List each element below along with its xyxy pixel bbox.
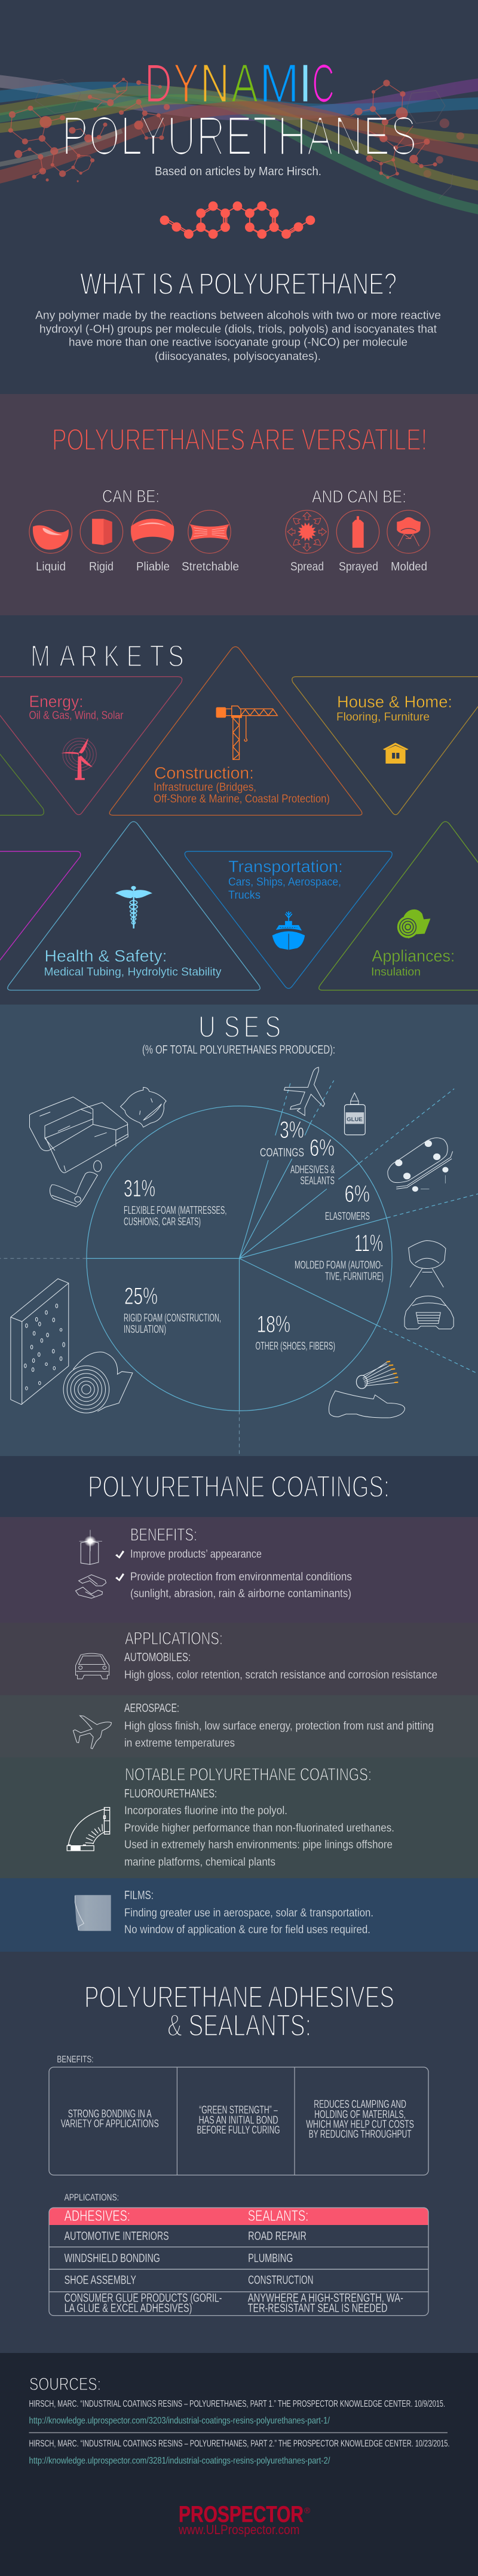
slice label: rigid foam 25 percent: RIGID FOAM (CONSTRUCTION,: [124, 1312, 221, 1324]
slice label: elastomers 6 percent: [325, 1181, 370, 1222]
market: construction: Off-Shore & Marine, Coastal Protection): [154, 793, 330, 805]
market: transportation: [185, 851, 392, 988]
icon: protecting hands: [76, 1575, 106, 1598]
icon: car seat: [50, 1161, 102, 1207]
slice label: adhesives and sealants 6 percent: ADHESIVES &: [290, 1164, 335, 1176]
text: aerospace description: in extreme temperatures: [124, 1737, 235, 1750]
heading: and can be: AND CAN BE:: [312, 487, 406, 507]
slice label: rigid foam 25 percent: INSULATION): [124, 1323, 166, 1335]
icon: pipe elbow: [67, 1808, 110, 1851]
logo: prospector: www.ULProspector.com: [178, 2522, 300, 2537]
icon: insulation roll: [397, 909, 430, 939]
title: DYNAMIC: A: [231, 54, 258, 114]
slice label: coatings 3 percent: COATINGS: [260, 1146, 304, 1159]
table header: [65, 2208, 308, 2224]
slice label: adhesives and sealants 6 percent: SEALANTS: [300, 1174, 335, 1186]
market: appliances: Insulation: [371, 966, 421, 978]
slice label: rigid foam 25 percent: [124, 1283, 221, 1335]
market: appliances: [319, 822, 478, 990]
logo: prospector: [178, 2502, 311, 2537]
table rows: PLUMBING: [248, 2252, 293, 2265]
icon: fibers: [356, 1362, 398, 1388]
icon: shiny box: [79, 1530, 102, 1564]
table: benefits: [49, 2067, 428, 2175]
panel: uses: [0, 1005, 478, 1457]
text block: definition: hydroxyl (-OH) groups per molecule (diols, triols, polyols) and isocyanates that: [39, 322, 437, 335]
title: DYNAMIC: I: [298, 54, 313, 114]
panel: markets: [0, 639, 478, 990]
market: energy: Energy:: [29, 692, 84, 711]
market: house and home: House & Home:: [337, 692, 452, 711]
list item: provide protection: Provide protection from environmental conditions: [130, 1571, 352, 1583]
icon: mattresses: [29, 1097, 128, 1173]
title: DYNAMIC: Y: [173, 54, 199, 114]
market: energy: [0, 677, 182, 814]
icon: molded chair: [409, 1241, 446, 1287]
panel: coatings title: [0, 1456, 478, 1517]
subtitle: Based on articles by Marc Hirsch.: [155, 165, 321, 178]
slice label: elastomers 6 percent: ELASTOMERS: [325, 1210, 370, 1222]
panel: applications automobiles: [0, 1623, 478, 1695]
cell: strong bonding: STRONG BONDING IN A: [68, 2108, 152, 2120]
subheading: fluorourethanes: FLUOROURETHANES:: [124, 1787, 217, 1800]
icon: pillow: [121, 1087, 166, 1127]
table rows: AUTOMOTIVE INTERIORS: [65, 2230, 169, 2243]
slice label: flexible foam 31 percent: [124, 1176, 227, 1228]
slice label: other 18 percent: 18%: [257, 1311, 290, 1338]
text: aerospace description: [124, 1720, 434, 1750]
text: fluorourethanes description: [124, 1805, 394, 1869]
slice label: rigid foam 25 percent: 25%: [124, 1283, 158, 1310]
title: DYNAMIC: D: [145, 54, 172, 114]
text: films description: Finding greater use in aerospace, solar & transportation.: [124, 1907, 373, 1919]
source 1: [29, 2399, 445, 2426]
source 2: [29, 2439, 449, 2466]
shape labels: Stretchable: [182, 560, 239, 573]
market: transportation: Cars, Ships, Aerospace,: [228, 876, 341, 889]
cell: reduces clamping: REDUCES CLAMPING AND: [314, 2098, 406, 2110]
label: benefits: BENEFITS:: [57, 2055, 94, 2065]
slice label: flexible foam 31 percent: 31%: [124, 1176, 155, 1202]
heading: can be: CAN BE:: [102, 487, 160, 506]
market: house and home: Flooring, Furniture: [336, 711, 430, 724]
panel: notable polyurethane coatings: [0, 1757, 478, 1878]
subtitle: percent of total: (% OF TOTAL POLYURETHANES PRODUCED):: [142, 1043, 335, 1057]
table rows: ANYWHERE A HIGH-STRENGTH, WA-: [248, 2292, 403, 2305]
text block: definition: (diisocyanates, polyisocyanates).: [155, 350, 321, 363]
icon: glue bottle: [345, 1093, 365, 1135]
icon: wind turbine: [61, 738, 96, 780]
slice label: molded foam 11 percent: TIVE, FURNITURE): [325, 1271, 384, 1283]
heading: sources: SOURCES:: [29, 2374, 101, 2394]
text block: definition: Any polymer made by the reactions between alcohols with two or more reactive: [35, 309, 441, 322]
text: aerospace description: High gloss finish, low surface energy, protection from rust and pitting: [124, 1720, 434, 1733]
triangle: appliances left fragment: [0, 750, 44, 815]
icon: shoe: [329, 1391, 405, 1418]
list item: provide protection: (sunlight, abrasion, rain & airborne contaminants): [130, 1588, 351, 1600]
text block: definition: [35, 309, 441, 363]
slice label: coatings 3 percent: [260, 1117, 304, 1159]
label: applications: APPLICATIONS:: [65, 2193, 119, 2203]
text: films description: No window of application & cure for field uses required.: [124, 1924, 370, 1936]
market: health and safety: Health & Safety:: [44, 947, 167, 965]
slice label: coatings 3 percent: 3%: [280, 1117, 304, 1143]
icon: car: [76, 1653, 109, 1679]
heading: adhesives and sealants: & SEALANTS:: [167, 2008, 311, 2043]
shape labels: [36, 560, 427, 573]
text: fluorourethanes description: Incorporates fluorine into the polyol.: [124, 1805, 287, 1817]
cell: strong bonding: VARIETY OF APPLICATIONS: [61, 2118, 159, 2130]
heading: uses: USES: [198, 1010, 281, 1044]
icon: liquid: [29, 510, 72, 553]
decorative molecule network: [8, 78, 464, 199]
icon: glue bottle: GLUE: [347, 1116, 363, 1123]
cell: reduces clamping: [306, 2098, 414, 2140]
subheading: films: FILMS:: [124, 1889, 154, 1902]
market: construction: Construction:: [154, 764, 254, 782]
table rows: TER-RESISTANT SEAL IS NEEDED: [248, 2302, 387, 2315]
cell: green strength: [197, 2104, 280, 2136]
table rows: WINDSHIELD BONDING: [65, 2252, 160, 2265]
table rows: LA GLUE & EXCEL ADHESIVES): [65, 2302, 192, 2315]
logo: prospector: PROSPECTOR: [179, 2502, 304, 2528]
icon: house: [383, 743, 409, 764]
market: transportation: Trucks: [228, 889, 261, 902]
table header: ADHESIVES:: [65, 2208, 130, 2224]
cell: green strength: BEFORE FULLY CURING: [197, 2124, 280, 2136]
panel: applications aerospace: [0, 1695, 478, 1757]
table rows: [65, 2230, 403, 2315]
icon: airplane: [73, 1716, 111, 1749]
heading: benefits: BENEFITS:: [130, 1525, 197, 1545]
heading: applications: APPLICATIONS:: [125, 1629, 223, 1649]
subheading: aerospace: AEROSPACE:: [124, 1702, 179, 1715]
table: applications: [49, 2208, 428, 2315]
slice label: molded foam 11 percent: MOLDED FOAM (AUTOMO-: [295, 1259, 383, 1271]
title: DYNAMIC: N: [200, 54, 229, 114]
heading: adhesives and sealants: [84, 1980, 394, 2043]
market: energy: Oil & Gas, Wind, Solar: [29, 710, 124, 722]
shape labels: Molded: [391, 560, 427, 573]
text block: definition: have more than one reactive isocyanate group (-NCO) per molecule: [69, 336, 407, 349]
panel: sources footer: [0, 2353, 478, 2576]
icon: airplane: [284, 1067, 324, 1116]
slice label: molded foam 11 percent: [295, 1231, 384, 1283]
title: DYNAMIC: M: [259, 54, 299, 114]
decorative ribbons: [0, 81, 478, 210]
panel: films: [0, 1878, 478, 1952]
market: construction: Infrastructure (Bridges,: [154, 781, 256, 794]
table rows: ROAD REPAIR: [248, 2230, 307, 2243]
panel: adhesives and sealants: [49, 1980, 428, 2315]
icon: sprayed: [336, 510, 379, 553]
icon: car: [405, 1296, 454, 1329]
source 2: http://knowledge.ulprospector.com/3281/industrial-coatings-resins-polyurethanes-part-2/: [29, 2456, 330, 2466]
cell: reduces clamping: WHICH MAY HELP CUT COSTS: [306, 2118, 414, 2130]
icon: rigid: [80, 510, 123, 553]
cell: green strength: “GREEN STRENGTH” –: [199, 2104, 278, 2116]
title: DYNAMIC: [145, 54, 335, 114]
table rows: CONSUMER GLUE PRODUCTS (GORIL-: [65, 2292, 222, 2305]
slice label: other 18 percent: OTHER (SHOES, FIBERS): [256, 1340, 335, 1352]
text: fluorourethanes description: Used in extremely harsh environments: pipe linings offshore: [124, 1839, 393, 1851]
icon: stretchable: [188, 510, 231, 553]
slice label: adhesives and sealants 6 percent: [290, 1135, 335, 1186]
icon: pliable: [131, 510, 174, 553]
cell: reduces clamping: BY REDUCING THROUGHPUT: [309, 2128, 412, 2140]
icon: insulation roll outline: [63, 1352, 133, 1413]
heading: markets: MARKETS: [30, 639, 184, 673]
icon: polyurethane molecule: [160, 202, 315, 239]
text: fluorourethanes description: Provide higher performance than non-fluorinated urethanes.: [124, 1822, 394, 1835]
panel: what is a polyurethane: [35, 267, 441, 363]
shape labels: Liquid: [36, 560, 66, 573]
slice label: flexible foam 31 percent: FLEXIBLE FOAM (MATTRESSES,: [124, 1204, 227, 1216]
cell: strong bonding: [61, 2108, 159, 2130]
market: house and home: [292, 677, 478, 814]
panel: header: [0, 54, 478, 239]
market: appliances: Appliances:: [372, 947, 455, 965]
slice label: adhesives and sealants 6 percent: 6%: [310, 1135, 335, 1161]
text: automobiles description: High gloss, color retention, scratch resistance and corrosion resistance: [124, 1669, 437, 1681]
slice label: other 18 percent: [256, 1311, 335, 1352]
icon: film sheet: [75, 1895, 111, 1931]
icon: rigid foam board: [11, 1278, 69, 1405]
table header: SEALANTS:: [248, 2208, 308, 2224]
triangle: left magenta fragment: [0, 851, 81, 964]
market: construction: [109, 647, 362, 815]
heading: notable coatings: NOTABLE POLYURETHANE COATINGS:: [125, 1765, 372, 1784]
icon: skateboard: [388, 1138, 453, 1191]
market: transportation: Transportation:: [228, 857, 343, 876]
text: films description: [124, 1907, 373, 1936]
market: health and safety: Medical Tubing, Hydrolytic Stability: [44, 966, 222, 978]
shape labels: Spread: [290, 560, 324, 573]
panel: benefits: [0, 1517, 478, 1623]
slice label: flexible foam 31 percent: CUSHIONS, CAR SEATS): [124, 1216, 201, 1228]
shape labels: Sprayed: [339, 560, 378, 573]
icon: ship: [272, 911, 305, 950]
icon: molded: [387, 510, 430, 553]
cell: reduces clamping: HOLDING OF MATERIALS,: [314, 2108, 406, 2120]
logo: prospector: ®: [304, 2505, 311, 2515]
text: fluorourethanes description: marine platforms, chemical plants: [124, 1856, 275, 1869]
pie chart: [0, 1081, 478, 1457]
source 1: http://knowledge.ulprospector.com/3203/industrial-coatings-resins-polyurethanes-part-1/: [29, 2416, 330, 2426]
icon: crane: [216, 706, 277, 759]
slice label: elastomers 6 percent: 6%: [344, 1181, 370, 1207]
cell: green strength: HAS AN INITIAL BOND: [198, 2114, 278, 2126]
shape labels: Pliable: [136, 560, 170, 573]
list item: provide protection: [115, 1571, 352, 1600]
subheading: automobiles: AUTOMOBILES:: [124, 1651, 191, 1664]
icon: spread: [286, 510, 328, 553]
table rows: CONSTRUCTION: [248, 2274, 313, 2287]
table rows: SHOE ASSEMBLY: [65, 2274, 136, 2287]
shape labels: Rigid: [89, 560, 114, 573]
title: DYNAMIC: C: [312, 54, 335, 114]
list item: improve appearance: Improve products’ appearance: [130, 1548, 262, 1561]
market: health and safety: [8, 822, 260, 990]
panel: polyurethanes are versatile: [0, 394, 478, 615]
slice label: molded foam 11 percent: 11%: [354, 1231, 383, 1257]
icon: caduceus: [115, 886, 152, 929]
